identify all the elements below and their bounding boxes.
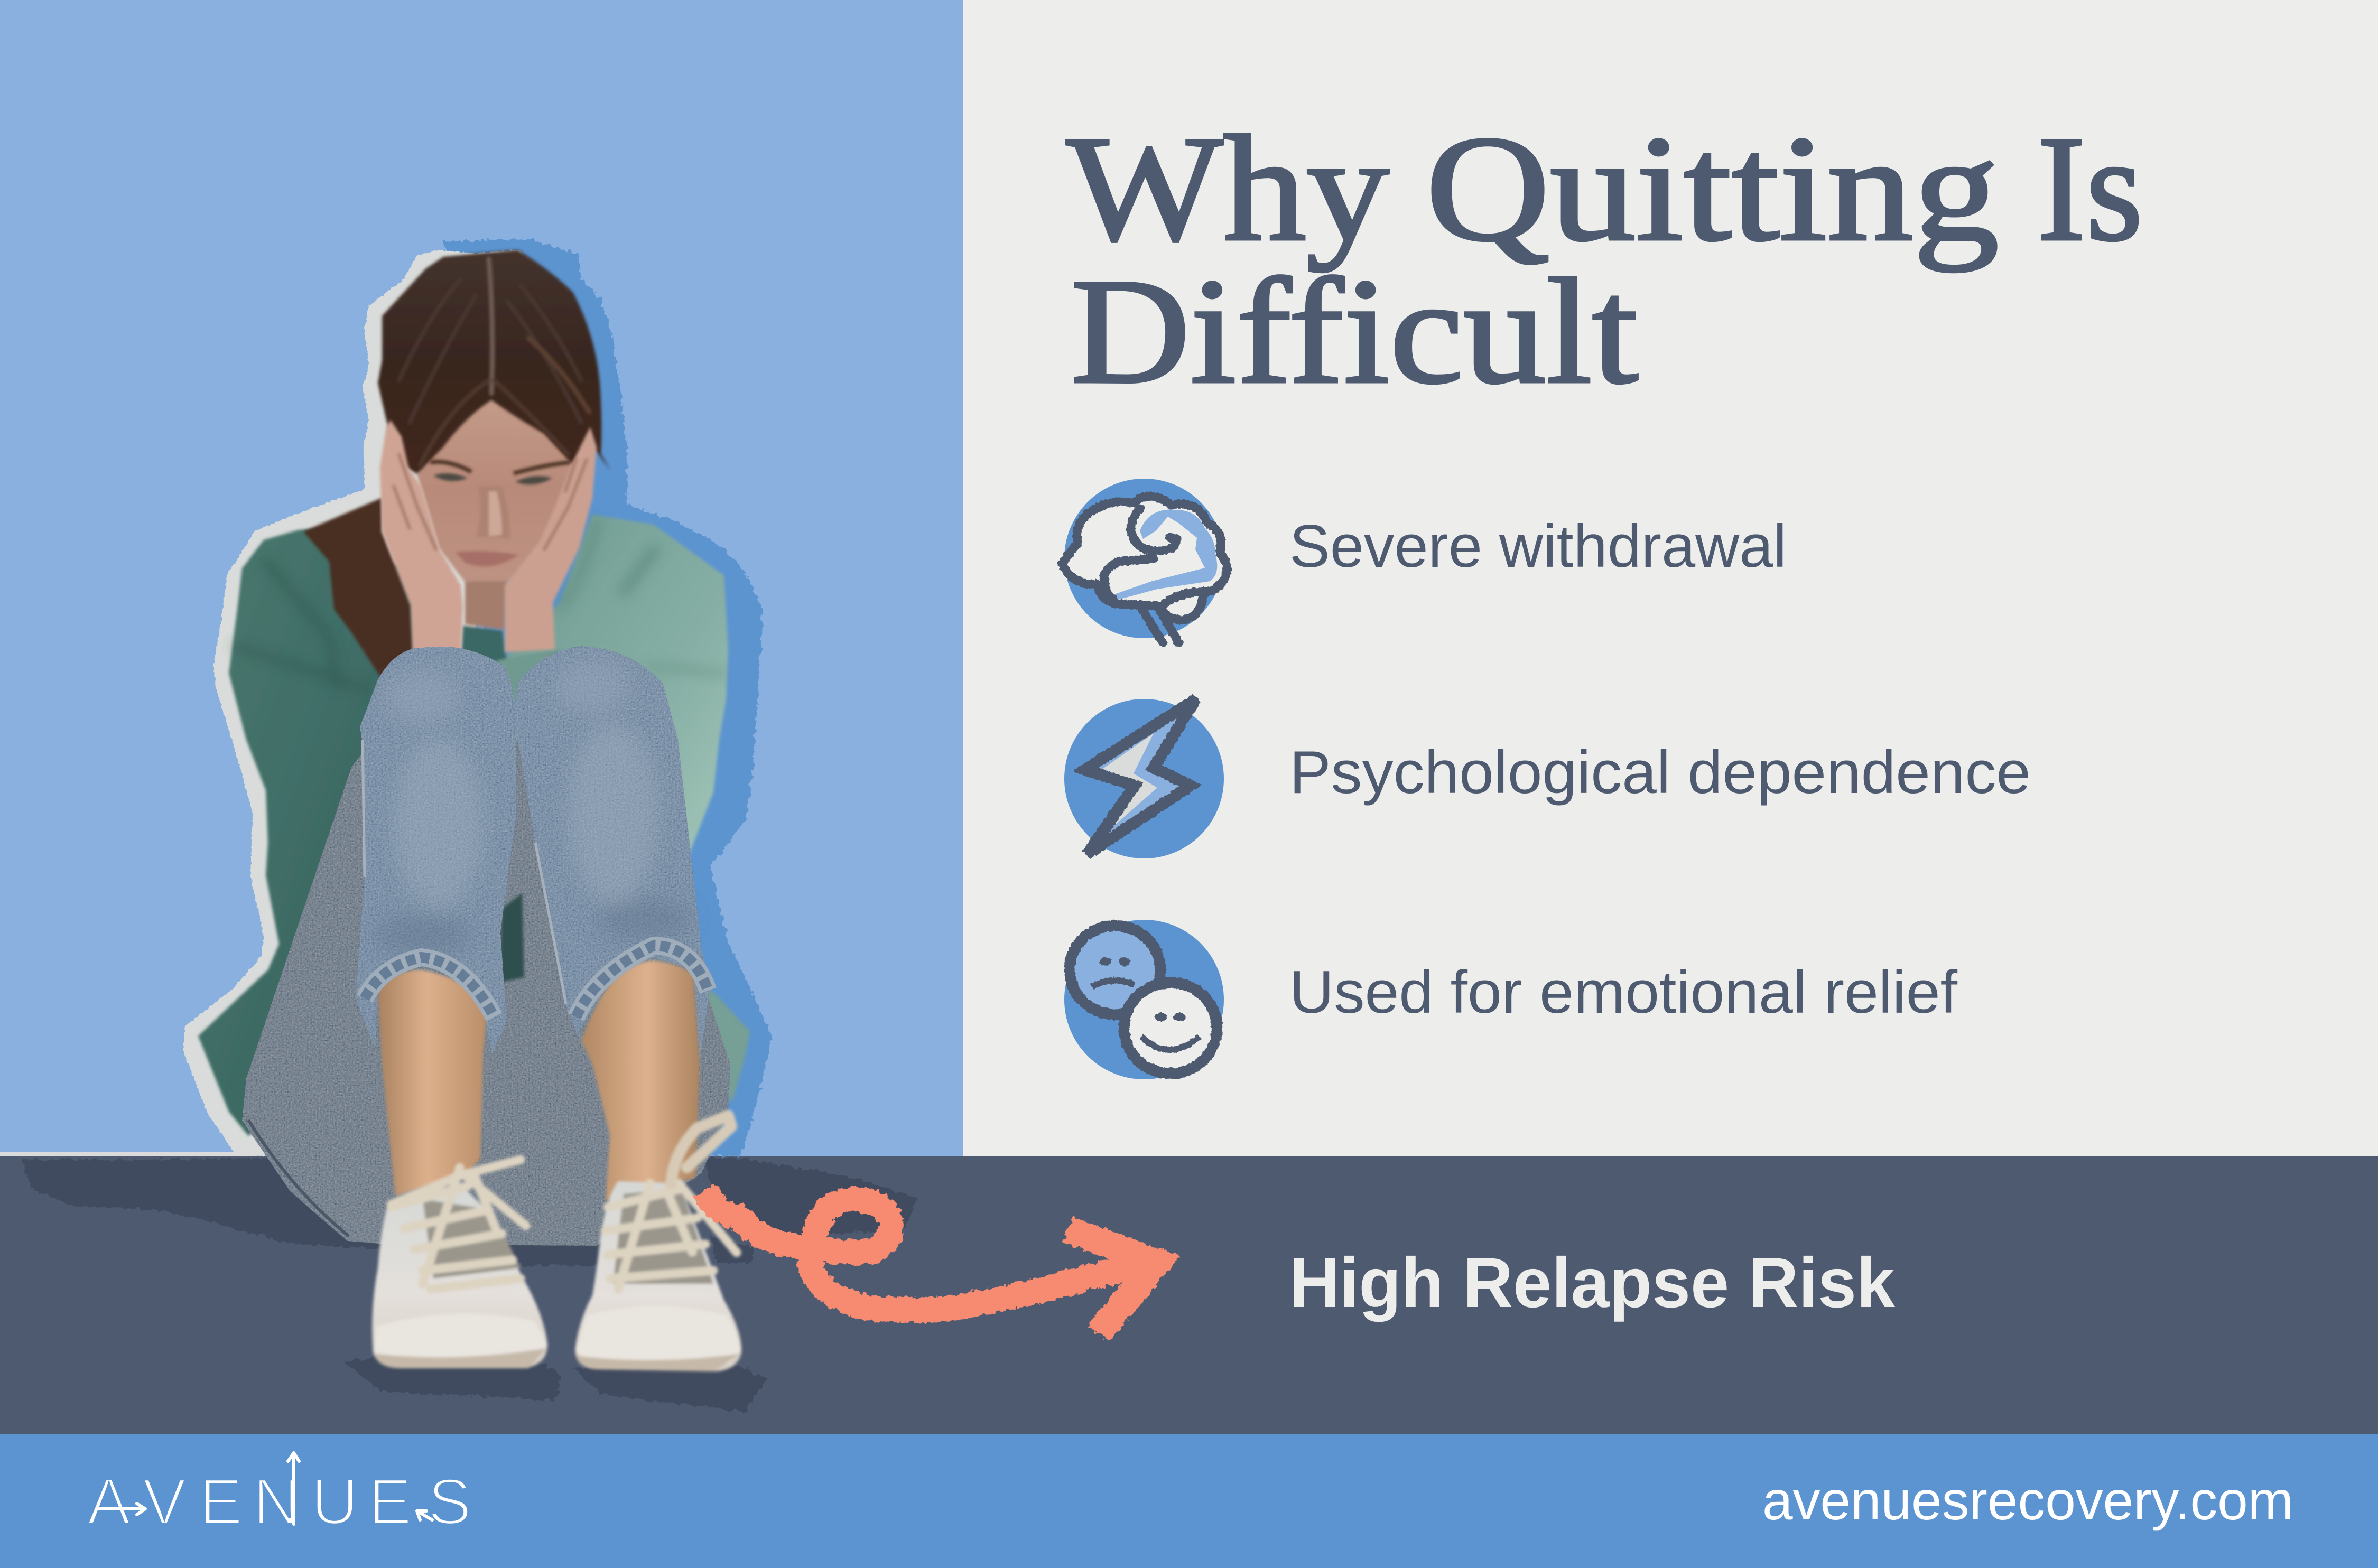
text: severe withdrawal: Severe withdrawal [1289,513,1787,580]
right hand [505,427,597,652]
title: Is [2037,105,2143,272]
text: used for emotional relief: Used for emotional relief [1289,959,1957,1026]
title: Why [1066,105,1389,273]
torn paper: pale grey edge [183,250,568,1156]
torn paper: blue backing [443,239,772,1156]
sweater: lit right half [502,515,728,866]
jeans: seat and thighs [242,740,730,1246]
jeans: hems and seams [248,740,708,1236]
hair: falling ponytail [303,498,413,679]
left ankle [378,970,487,1196]
hair: parting and strands [399,259,589,465]
text: psychological dependence: Psychological dependence [1289,739,2031,806]
icon: brain [1062,479,1227,642]
logo: Avenues: AVENUES [87,1466,471,1538]
icon: sad and happy faces [1064,920,1224,1079]
hair: head [378,250,610,474]
left hand [380,420,463,656]
icon: lightning bolt [1064,699,1224,858]
arrow: hand-drawn coral squiggle [704,1190,1157,1333]
face [417,365,584,588]
panel: light grey text background [963,0,2378,1156]
right ankle [581,960,700,1201]
title: Quitting [1426,105,1999,273]
panel: light blue photo background [0,0,963,1156]
facial features [430,462,570,566]
neck [465,581,507,630]
title [1066,105,2143,415]
photo: shadows on the floor [21,1157,916,1412]
text: website address: avenuesrecovery.com [1762,1470,2293,1532]
jeans: fading patches [375,660,692,956]
panel: dark outcome band [0,1156,2378,1434]
title: Difficult [1071,247,1639,415]
sweater: folds and seams [235,520,724,689]
left sneaker [372,1160,547,1368]
photo: torn-paper cut-out of the seated woman [0,239,772,1371]
sweater: right hem [703,983,750,1102]
jeans: right shin [514,646,711,1064]
panel: blue footer [0,1434,2378,1568]
sweater: gap between legs [499,893,524,983]
hand: finger lines [394,454,587,549]
right sneaker [575,1116,741,1371]
sweater: shadowed left half [198,528,423,1136]
jeans: left shin [356,647,516,1054]
text: high relapse risk: High Relapse Risk [1289,1244,1895,1322]
sweater: centre shirt and cuff [460,626,507,682]
floor edge line [0,1152,255,1156]
